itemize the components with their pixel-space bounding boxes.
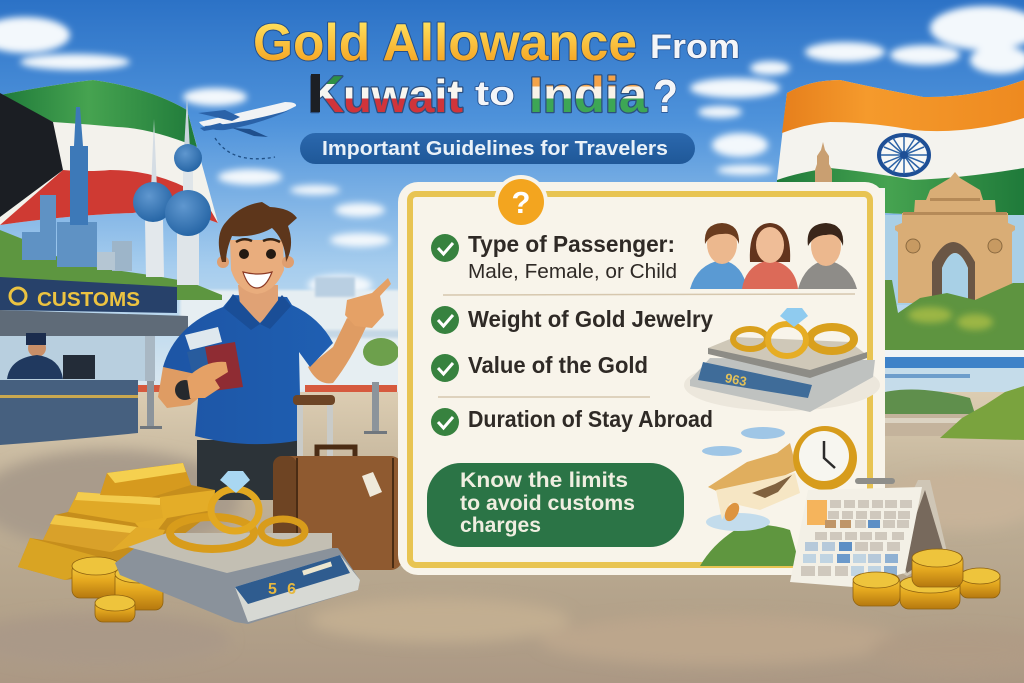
legs — [197, 440, 298, 500]
customs desk — [0, 277, 188, 445]
small coins left — [72, 557, 163, 622]
right background: skyline, water strip and trees — [885, 215, 1024, 436]
Kuwait Towers and skyline — [22, 97, 211, 285]
background: trees behind Kuwait skyline — [0, 230, 222, 300]
question mark icon: ? — [512, 185, 530, 220]
India Gate — [895, 172, 1015, 303]
customs officer — [7, 333, 63, 379]
portrait: female — [742, 223, 798, 289]
question mark icon — [494, 175, 548, 229]
queue barriers — [138, 381, 397, 434]
title — [253, 14, 740, 124]
subtitle pill — [300, 133, 695, 164]
background: clouds — [0, 6, 1024, 295]
shirt — [163, 295, 333, 444]
traveler man — [158, 202, 391, 500]
trees around India Gate — [885, 280, 1024, 350]
passenger portraits — [690, 223, 857, 289]
head — [230, 240, 284, 294]
portrait: child — [798, 223, 857, 289]
panel scale with rings: 963 — [724, 370, 748, 389]
title line 1: Gold Allowance — [253, 14, 637, 72]
callout: know the limits: Know the limits — [460, 469, 628, 492]
title line 2 — [308, 66, 678, 124]
suitcase handle — [293, 395, 335, 458]
background: ground — [0, 392, 1024, 683]
weighing scale with rings — [115, 471, 360, 624]
callout: know the limits: charges — [460, 514, 541, 537]
item: weight of gold jewelry: Weight of Gold Jewelry — [468, 306, 713, 332]
customs desk: CUSTOMS — [37, 289, 140, 311]
right arm pointing — [308, 318, 366, 383]
watch — [175, 380, 195, 400]
background: sky — [0, 0, 1024, 410]
title line 2: uwait — [343, 70, 463, 122]
gold bars stack — [18, 463, 215, 580]
calendar — [790, 478, 947, 587]
main guidelines panel — [398, 175, 885, 575]
Indian monument spire — [815, 142, 832, 182]
background: hazy city center — [180, 277, 400, 390]
portrait: male — [690, 223, 747, 289]
subtitle pill: Important Guidelines for Travelers — [322, 138, 668, 160]
item: type of passenger: Male, Female, or Child — [468, 261, 677, 283]
India flag — [777, 80, 1024, 220]
small tree mid — [363, 338, 399, 366]
airplane with dashed route — [198, 102, 296, 159]
Kuwait flag — [0, 80, 218, 225]
callout: know the limits — [427, 463, 684, 547]
title line 2: to — [475, 75, 515, 113]
item: type of passenger: Type of Passenger: — [468, 231, 675, 257]
callout: know the limits: to avoid customs — [460, 492, 635, 515]
title line 2: ? — [653, 70, 678, 122]
title line 1: From — [650, 28, 740, 66]
boarding pass — [185, 327, 222, 350]
ground blotches — [0, 450, 1024, 670]
panel bottom-right landscape — [700, 427, 800, 566]
item: value of the gold: Value of the Gold — [468, 352, 648, 378]
title line 2: India — [529, 67, 648, 123]
neck and collar — [238, 285, 278, 323]
suitcase — [273, 447, 402, 570]
clock — [793, 426, 857, 490]
panel scale with rings — [684, 308, 880, 412]
passport — [187, 342, 243, 398]
item: duration of stay abroad: Duration of Stay Abroad — [468, 406, 713, 432]
item: type of passenger — [431, 231, 677, 283]
title line 2: K — [308, 66, 344, 124]
small coins right — [853, 549, 1000, 609]
left arm — [158, 367, 215, 408]
weighing scale with rings: 56 — [268, 581, 296, 598]
item: value of the gold — [431, 352, 648, 382]
right bush — [940, 386, 1024, 440]
